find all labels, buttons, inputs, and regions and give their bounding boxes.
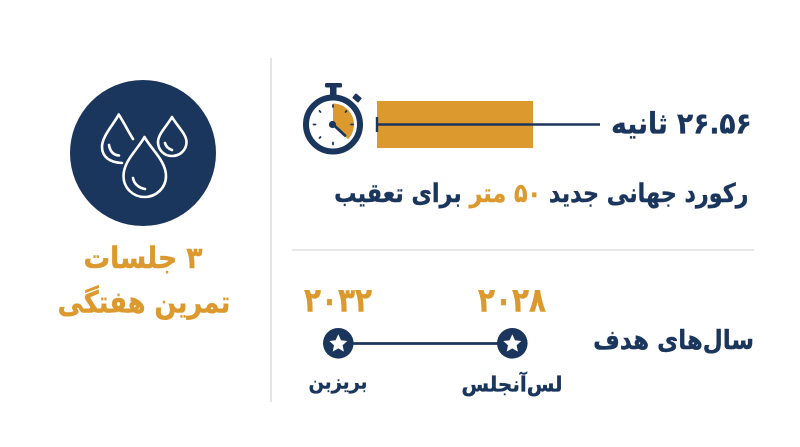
label: Los Angeles: لس‌آنجلس: [462, 371, 562, 397]
icon: water drops in circle: [70, 80, 216, 226]
text: target years label: سال‌های هدف: [593, 326, 754, 356]
bar: record time bar: [377, 101, 600, 148]
text: weekly sessions line 2: تمرین هفتگی: [58, 285, 230, 320]
year: 2032: ۲۰۳۲: [304, 280, 372, 319]
year: 2028: ۲۰۲۸: [478, 280, 546, 319]
timeline: target years: [323, 328, 528, 359]
heading: record time: ۲۶.۵۶ ثانیه: [611, 106, 752, 141]
text: weekly sessions line 1: ۳ جلسات: [84, 242, 202, 276]
icon: stopwatch: [306, 83, 362, 152]
text: new world record: رکورد جهانی جدید ۵۰ متر برای تعقیب: [334, 180, 748, 209]
label: Brisbane: بریزبن: [309, 371, 367, 394]
